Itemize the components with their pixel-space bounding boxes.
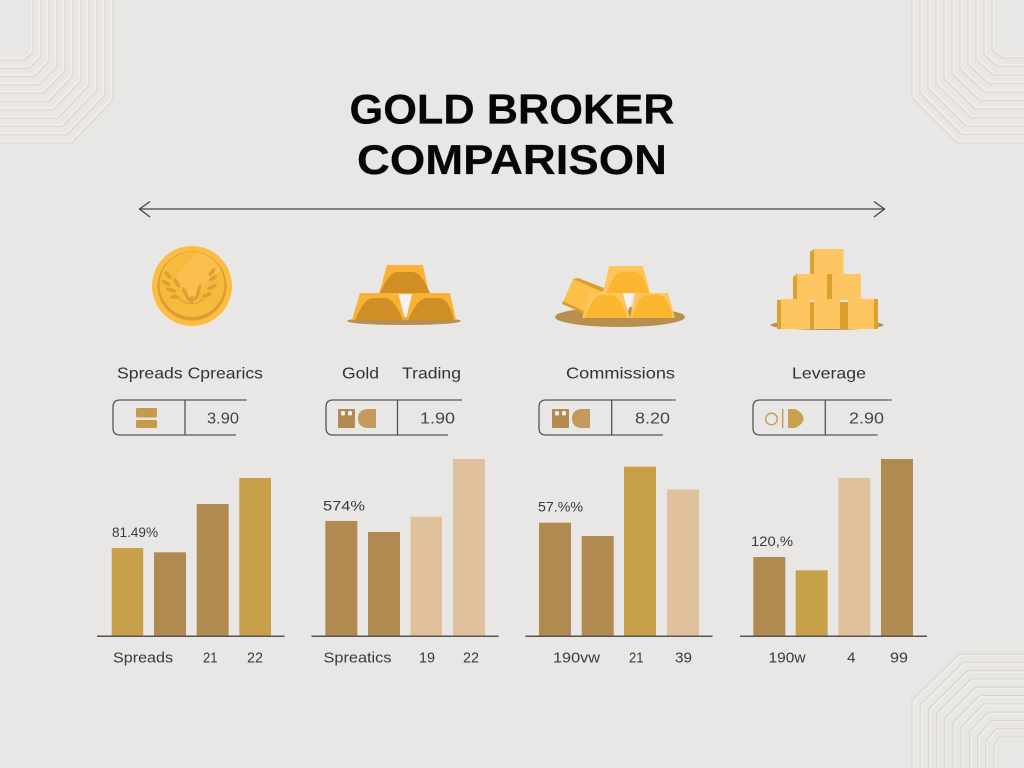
bar chart: column 1: 21: [203, 650, 218, 666]
bar chart: column 2: [312, 459, 498, 666]
icon: gold cube pyramid: [770, 249, 884, 330]
value box: column 4: [753, 400, 892, 435]
value box: column 3: 8.20: [635, 410, 670, 428]
title: COMPARISON: [357, 136, 667, 183]
bar chart: column 3: 39: [675, 650, 692, 666]
icon: gold bars on a tray: [555, 266, 685, 327]
decorative corner lines: top left: [0, 0, 113, 143]
value box: column 1: 3.90: [207, 410, 239, 428]
bar chart: column 4: 4: [847, 650, 856, 666]
value box: column 2: [326, 400, 462, 435]
bar chart: column 2: 19: [419, 650, 435, 666]
bar chart: column 1: Spreads: [113, 650, 173, 666]
bar chart: column 3: [526, 467, 712, 666]
value box: column 4: 2.90: [849, 410, 884, 428]
decorative corner lines: bottom right: [912, 654, 1024, 768]
title: [350, 86, 674, 183]
decorative corner lines: top right: [912, 0, 1024, 143]
icon: gold coin: [152, 246, 232, 326]
bar chart: column 2: 574%: [323, 498, 365, 514]
double-headed arrow: [140, 202, 884, 217]
bar chart: column 1: 81.49%: [112, 524, 158, 540]
label: column 3: Commissions: [566, 366, 675, 382]
bar chart: column 2: 22: [463, 650, 479, 666]
label: column 1: Spreads Cprearics: [117, 366, 263, 382]
value box: column 3: [539, 400, 676, 435]
bar chart: column 3: 190vw: [553, 650, 600, 666]
bar chart: column 2: Spreatics: [324, 650, 392, 666]
bar chart: column 4: 99: [890, 650, 908, 666]
title: GOLD BROKER: [350, 86, 674, 132]
bar chart: column 3: 57.%%: [538, 498, 583, 514]
bar chart: column 1: 22: [247, 650, 263, 666]
bar chart: column 3: 21: [629, 650, 644, 666]
label: column 2: [342, 366, 461, 382]
bar chart: column 1: [97, 478, 284, 666]
label: column 4: Leverage: [792, 366, 866, 382]
label: column 2: Gold: [342, 366, 379, 382]
value box: column 2: 1.90: [420, 410, 455, 428]
label: column 2: Trading: [402, 366, 461, 382]
value box: column 1: [113, 400, 247, 435]
icon: stacked gold bars: [347, 265, 461, 325]
bar chart: column 4: 120,%: [751, 533, 793, 549]
bar chart: column 4: [740, 459, 927, 666]
bar chart: column 4: 190w: [768, 650, 806, 666]
